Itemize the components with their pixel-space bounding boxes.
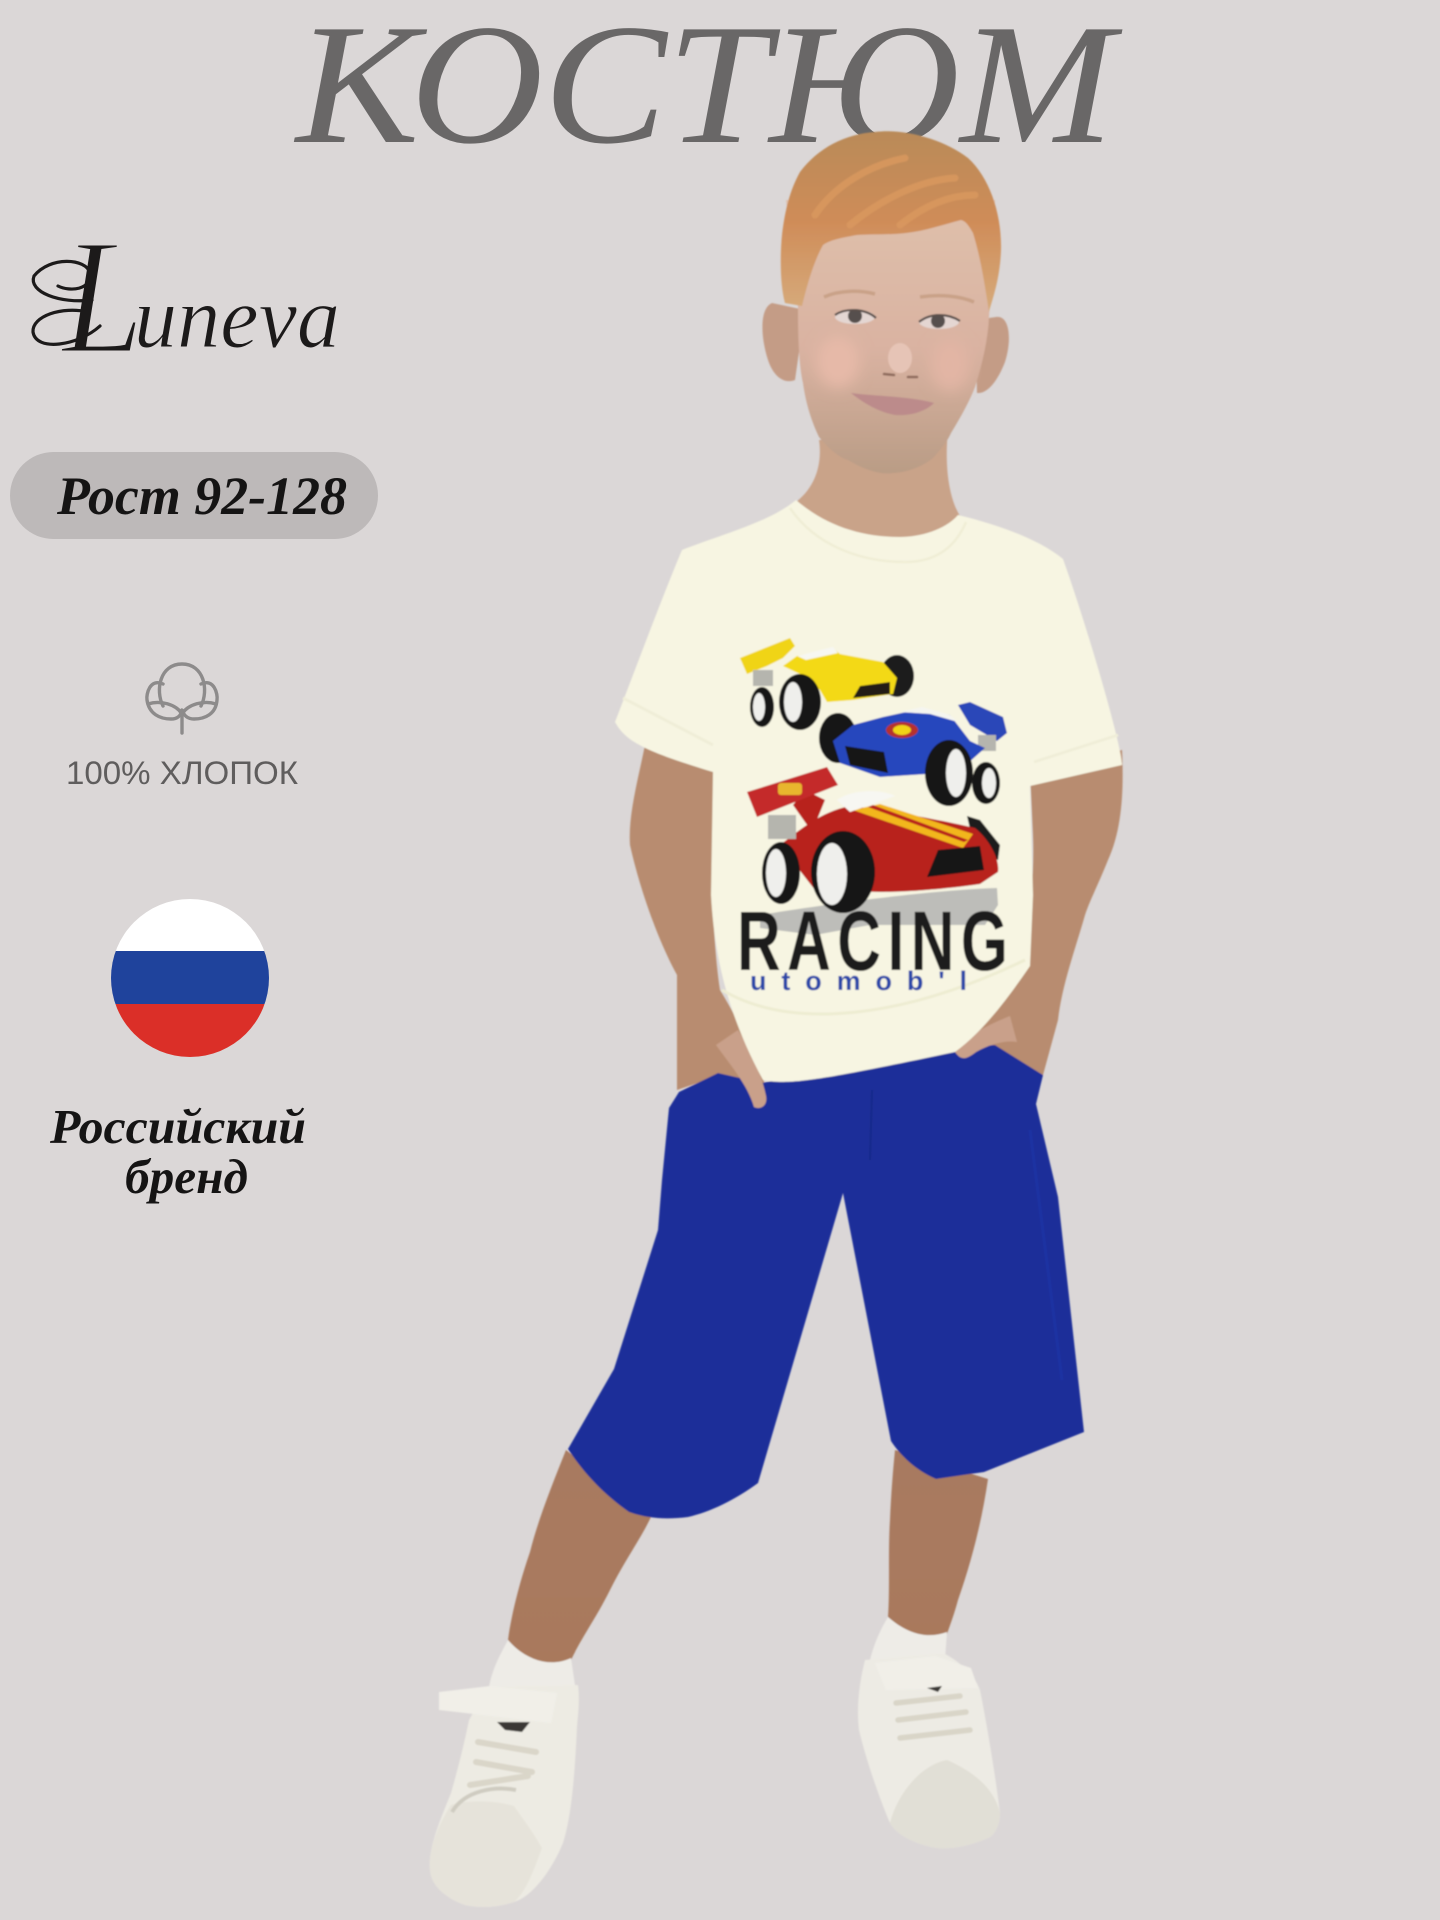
print: blue race car [819,702,1007,806]
neck [796,430,960,545]
figure: boy wearing the outfit [430,131,1123,1907]
hair [781,131,1001,312]
face [786,200,995,473]
print: RACING lettering: RACING [737,894,1014,988]
print: yellow race car [740,638,914,730]
height badge [10,452,378,539]
brand origin text [49,1099,306,1204]
brand origin text: бренд [125,1149,248,1204]
right hand over shorts [955,1016,1017,1058]
arms [630,745,1123,1106]
hair strands [815,158,975,225]
icon: cotton flower [147,664,217,733]
shorts [568,1045,1084,1518]
t-shirt [615,500,1122,1082]
left shoe [430,1685,579,1907]
icon: russian flag [111,899,269,1057]
brand origin text: Российский [49,1099,306,1154]
socks [488,1617,947,1695]
ears [762,303,1009,393]
brows [824,291,974,302]
logo: Luneva: L [60,205,144,388]
cotton label: 100% ХЛОПОК [66,755,298,791]
nose [888,343,912,373]
left hand over shorts [716,1030,766,1108]
logo: Luneva [33,205,340,388]
mouth [851,393,934,415]
logo: Luneva: uneva [134,270,340,367]
right shoe [858,1653,1000,1848]
legs [508,1450,988,1663]
height badge: Рост 92-128 [56,466,347,526]
cheeks [816,336,860,388]
head [762,131,1009,473]
eyes [835,309,960,329]
print: red race car [747,767,1000,935]
print: automobile lettering: utomob'l [750,966,967,996]
